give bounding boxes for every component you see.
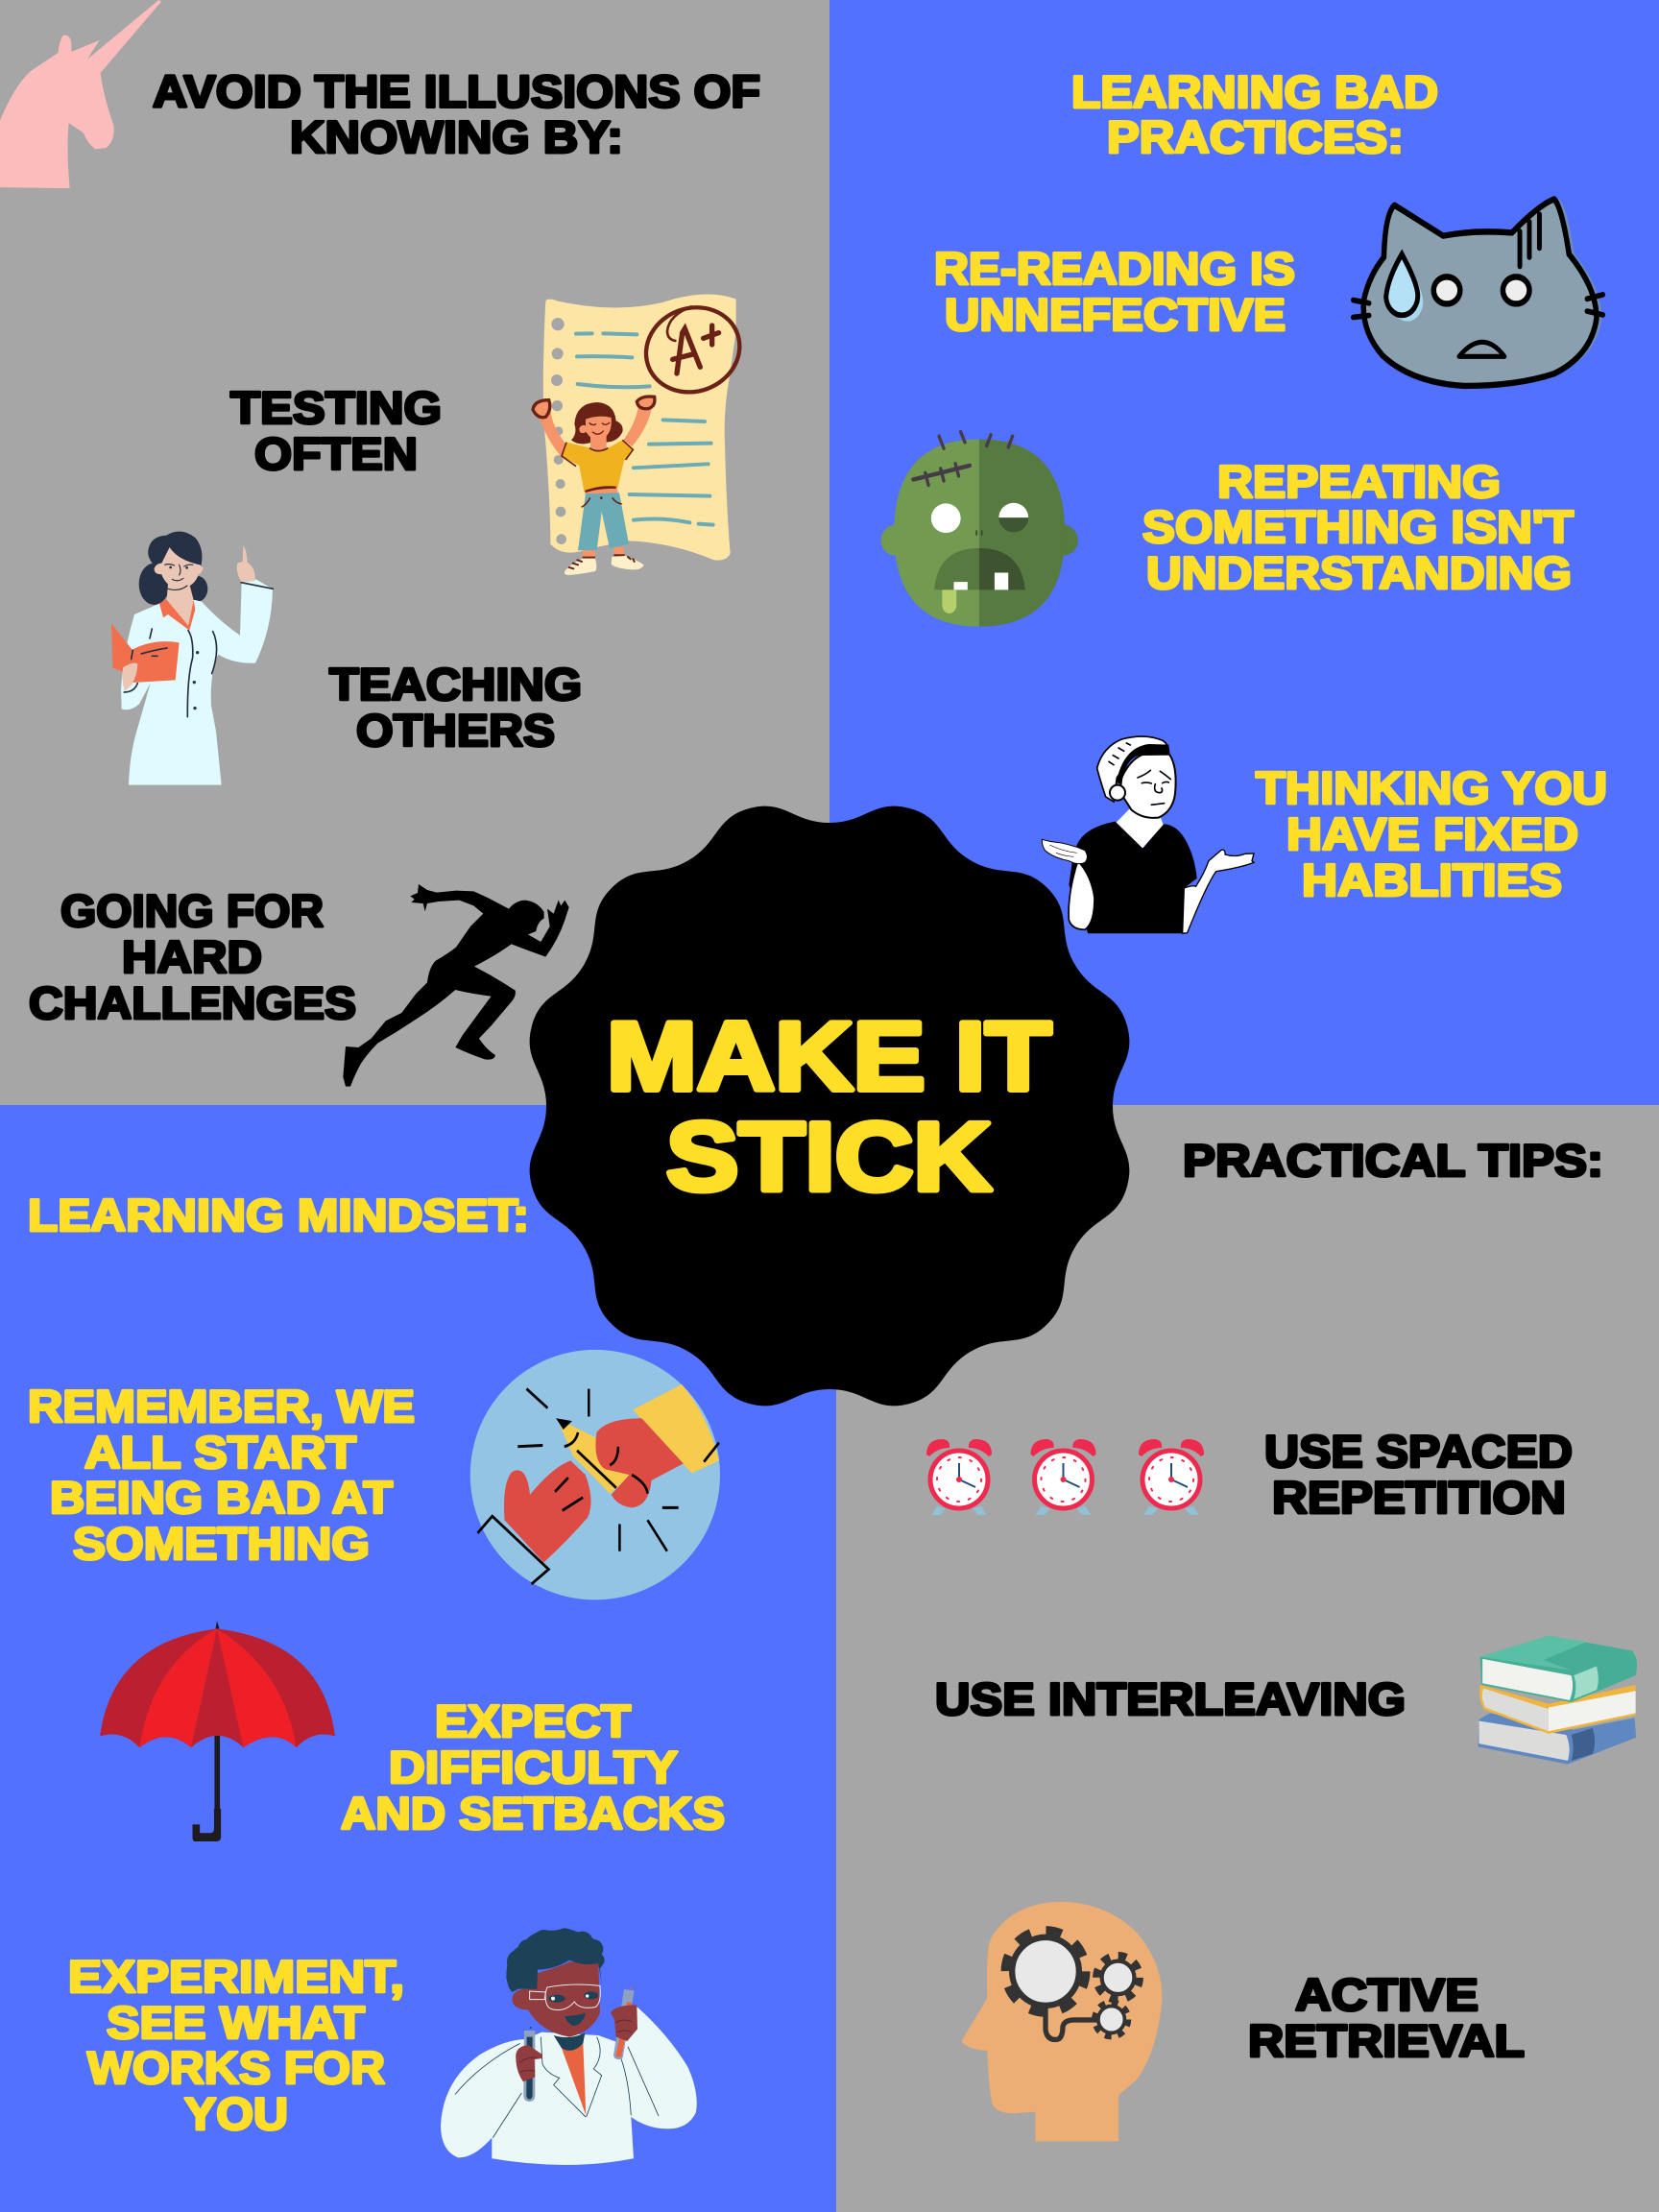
text: teaching others: OTHERS	[356, 705, 555, 756]
text: going for hard challenges: GOING FOR	[60, 885, 324, 936]
text: thinking you have fixed hablities: HAVE FIXED	[1286, 808, 1578, 859]
text: expect difficulty and setbacks	[341, 1695, 725, 1839]
icon: sprinter silhouette	[343, 884, 569, 1087]
icon: zombie head	[880, 432, 1078, 627]
text: thinking you have fixed hablities: HABLITIES	[1302, 854, 1562, 905]
text: teaching others	[329, 659, 582, 756]
heading: practical tips: PRACTICAL TIPS:	[1183, 1135, 1603, 1186]
icon: shrugging man	[1042, 736, 1254, 933]
text: repeating something isn't understanding: SOMETHING ISN'T	[1142, 501, 1574, 552]
text: active retrieval	[1248, 1969, 1525, 2066]
text: re-reading is unnefective: RE-READING IS	[934, 243, 1295, 294]
icon: red umbrella	[100, 1621, 335, 1841]
text: thinking you have fixed hablities	[1256, 762, 1607, 905]
text: testing often: TESTING	[230, 382, 442, 433]
text: use spaced repetition: USE SPACED	[1264, 1426, 1573, 1477]
heading: learning bad practices: PRACTICES:	[1107, 111, 1404, 162]
icon: alarm clock 1	[926, 1439, 992, 1514]
text: remember, we all start being bad at something	[28, 1381, 415, 1569]
text: testing often	[230, 382, 442, 479]
heading: avoid the illusions of knowing by	[153, 65, 760, 162]
title: MAKE IT	[607, 1003, 1051, 1111]
icon: unicorn	[0, 0, 161, 188]
heading: learning mindset: LEARNING MINDSET:	[28, 1190, 529, 1240]
text: repeating something isn't understanding: REPEATING	[1217, 456, 1501, 507]
text: re-reading is unnefective: UNNEFECTIVE	[945, 289, 1286, 340]
text: experiment, see what works for you	[68, 1951, 404, 2139]
heading: learning bad practices: LEARNING BAD	[1071, 66, 1438, 117]
text: use spaced repetition: REPETITION	[1272, 1472, 1566, 1523]
icon: hands passing a pencil	[470, 1350, 720, 1599]
icon: teacher with book	[111, 532, 273, 785]
icon: sweating cat	[1353, 199, 1603, 386]
scalloped black badge	[530, 806, 1129, 1406]
icon: scientist with test tubes	[441, 1928, 697, 2165]
text: going for hard challenges: HARD	[122, 931, 262, 982]
text: remember, we all start being bad at something: SOMETHING	[73, 1518, 370, 1569]
icon: alarm clock 2	[1031, 1439, 1096, 1514]
text: active retrieval: RETRIEVAL	[1248, 2015, 1525, 2066]
text: experiment, see what works for you: WORKS FOR	[87, 2042, 385, 2093]
text: experiment, see what works for you: YOU	[184, 2088, 288, 2139]
text: active retrieval: ACTIVE	[1295, 1969, 1479, 2020]
text: remember, we all start being bad at something: REMEMBER, WE	[28, 1381, 415, 1431]
text: remember, we all start being bad at something: ALL START	[84, 1427, 356, 1478]
text: going for hard challenges	[29, 885, 356, 1028]
text: thinking you have fixed hablities: THINKING YOU	[1256, 762, 1607, 813]
text: repeating something isn't understanding: UNDERSTANDING	[1146, 547, 1572, 598]
panel: avoid the illusions of knowing	[0, 0, 830, 1105]
text: testing often: OFTEN	[254, 428, 418, 479]
icon: head with gears	[961, 1902, 1163, 2141]
panel: practical tips	[836, 1105, 1659, 2212]
text: repeating something isn't understanding	[1142, 456, 1574, 598]
panel: learning bad practices	[830, 0, 1659, 1105]
text: teaching others: TEACHING	[329, 659, 582, 709]
heading: avoid the illusions of knowing by: KNOWING BY:	[290, 111, 623, 162]
icon: alarm clock 3	[1139, 1439, 1204, 1514]
text: use interleaving: USE INTERLEAVING	[935, 1673, 1406, 1724]
title: STICK	[666, 1104, 992, 1212]
text: remember, we all start being bad at something: BEING BAD AT	[50, 1472, 393, 1523]
icon: girl with A+ test paper	[533, 295, 752, 575]
center badge: make it stick	[530, 806, 1129, 1406]
heading: avoid the illusions of knowing by: AVOID THE ILLUSIONS OF	[153, 65, 760, 117]
heading: learning bad practices	[1071, 66, 1438, 162]
icon: stack of books	[1478, 1636, 1637, 1765]
text: going for hard challenges: CHALLENGES	[29, 977, 356, 1028]
title	[607, 1003, 1051, 1212]
text: experiment, see what works for you: EXPERIMENT,	[68, 1951, 404, 2002]
text: use spaced repetition	[1264, 1426, 1573, 1523]
icon: alarm clocks	[926, 1439, 1204, 1514]
text: expect difficulty and setbacks: DIFFICULTY	[389, 1742, 678, 1792]
text: expect difficulty and setbacks: EXPECT	[435, 1695, 631, 1746]
panel: learning mindset	[0, 1105, 836, 2212]
text: re-reading is unnefective	[934, 243, 1295, 340]
text: expect difficulty and setbacks: AND SETBACKS	[341, 1788, 725, 1839]
text: experiment, see what works for you: SEE WHAT	[107, 1997, 365, 2048]
